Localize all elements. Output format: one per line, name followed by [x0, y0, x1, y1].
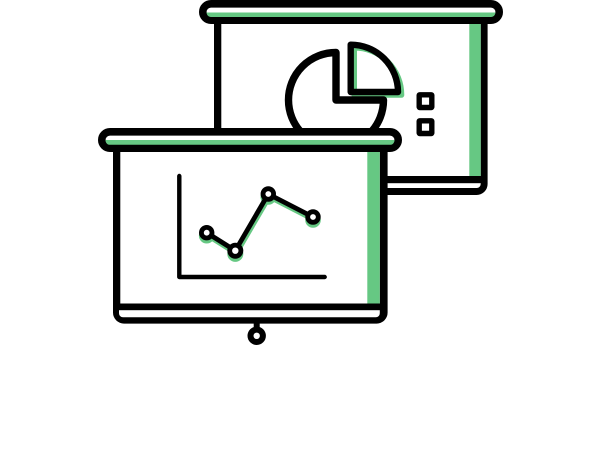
back roller bar	[203, 4, 499, 20]
back screen lower bar	[360, 176, 484, 183]
data line	[207, 194, 313, 251]
panel: front projector screen with line chart	[102, 132, 398, 342]
legend squares	[419, 95, 432, 134]
back screen surface	[221, 20, 481, 188]
line chart	[179, 176, 325, 277]
large pie segment	[289, 52, 384, 148]
pie slice	[351, 45, 398, 92]
data points	[201, 189, 318, 256]
panel: back projector screen with pie chart	[203, 4, 499, 195]
front screen surface	[119, 148, 380, 317]
front screen lower bar	[116, 304, 384, 310]
front roller bar	[102, 132, 398, 148]
chart axes	[179, 176, 325, 277]
pie slice green shadow	[354, 48, 402, 95]
line chart green shadow	[199, 189, 321, 262]
front screen green shade	[367, 150, 380, 305]
pull cord knob	[251, 321, 263, 342]
pie chart	[289, 45, 402, 148]
back screen green shade	[469, 22, 481, 177]
back screen frame	[214, 20, 488, 195]
front screen frame	[113, 148, 388, 324]
